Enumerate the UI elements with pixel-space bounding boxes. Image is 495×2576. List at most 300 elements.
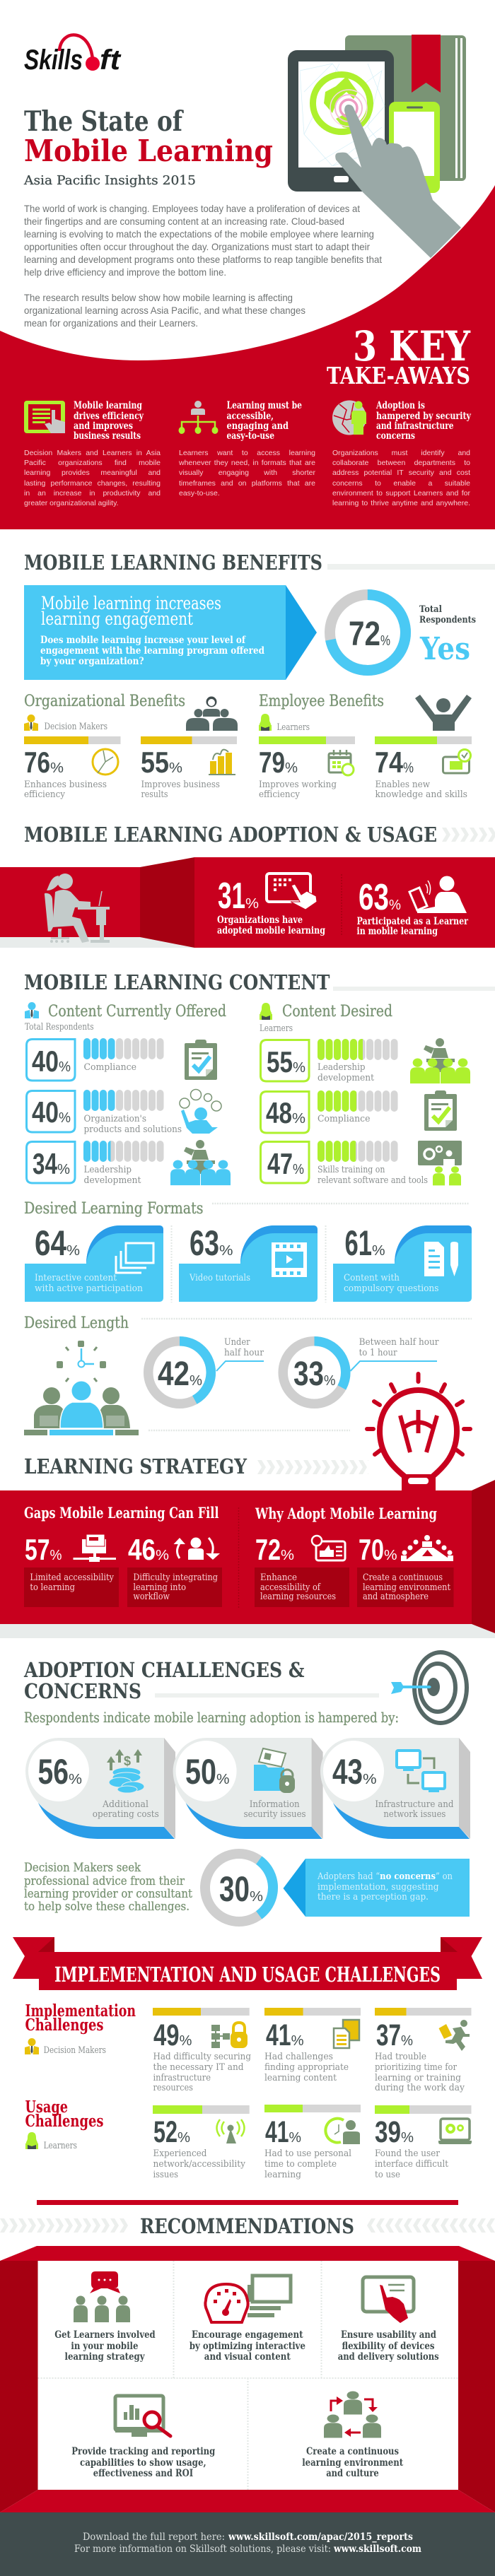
stat: 55 percent: 55	[141, 746, 169, 779]
heading: mobile learning content: MOBILE LEARNING CONTENT	[24, 970, 330, 994]
icon: clock and team at table	[24, 1341, 139, 1435]
recommendation: optimize interactive content: Encourage engagement	[192, 2329, 303, 2341]
stat: 49 percent infrastructure: the necessary IT and	[153, 2062, 243, 2073]
stat: compliance 40 percent: 40	[32, 1045, 59, 1078]
stat: 63 percent learners: 63	[359, 877, 389, 918]
panel: infrastructure card: 43	[332, 1752, 363, 1792]
footer	[0, 2512, 495, 2576]
text: takeaway one body: greater organizational agility.	[24, 499, 118, 507]
stat: 70 percent continuous environment	[357, 1533, 454, 1607]
stat: 49 percent infrastructure: resources	[153, 2083, 193, 2093]
heading: implementation challenges: Challenges	[25, 2016, 103, 2035]
heading: 3 key take-aways	[327, 322, 470, 389]
stat: skills training 47 percent: 47	[267, 1147, 293, 1180]
recommendation: continuous learning environment: learning environment	[302, 2457, 404, 2469]
text: takeaway three heading: and infrastructure	[376, 420, 454, 432]
stat: 76 percent: efficiency	[24, 789, 66, 800]
callout: adopters no concerns: Adopters had “no concerns” on	[317, 1871, 453, 1882]
stat: 52 percent network issues: issues	[153, 2170, 178, 2180]
stat: 41 percent finding content: 41	[266, 2018, 291, 2052]
stat: 72 percent enhance accessibility: accessibility of	[260, 1582, 321, 1593]
chart: donut 33 percent half to one hour	[283, 1337, 439, 1404]
text: takeaway three body: learning to thrive anytime and anywhere.	[332, 499, 470, 507]
icon: woman at desk	[45, 874, 110, 943]
icon: decision maker	[24, 714, 38, 731]
text: takeaway two body: whenever they need, in formats that are	[179, 459, 315, 467]
stat: 76 percent	[24, 736, 120, 800]
footer: www.skillsoft.com/apac/2015_reports	[228, 2531, 413, 2543]
panel: format video tutorials: 63	[190, 1223, 219, 1263]
callout: engagement question	[24, 585, 317, 680]
label: decision makers: Decision Makers	[44, 2045, 106, 2056]
text: takeaway two body	[179, 448, 315, 512]
text: takeaway one body: Pacific organizations find mobile	[24, 459, 161, 467]
callout: engagement question: learning engagement	[41, 608, 193, 629]
text: decision makers seek advice: professional advice from their	[24, 1874, 185, 1888]
stat: 46 percent difficulty integrating: learning into	[133, 1582, 186, 1593]
label: decision makers: Decision Makers	[44, 722, 107, 732]
label: total respondents: Total Respondents	[25, 1022, 94, 1033]
panel: learning strategy	[0, 1480, 495, 1638]
icon: respondent	[25, 1002, 39, 1018]
recommendation: optimize interactive content: by optimizing interactive	[190, 2341, 305, 2352]
panel: format video tutorials	[179, 1223, 318, 1302]
stat: 39 percent user interface: to use	[375, 2170, 400, 2180]
recommendation: tracking and reporting	[71, 2396, 216, 2479]
recommendation: usability and flexibility: and delivery solutions	[338, 2351, 439, 2363]
text: takeaway one body: in an increase in productivity and	[24, 489, 161, 498]
title: Asia Pacific Insights 2015	[23, 173, 196, 188]
stat: 57 percent limited accessibility: to learning	[30, 1582, 75, 1593]
icon: coins and arrows: $	[124, 1754, 131, 1768]
stat: 39 percent user interface: interface difficult	[375, 2159, 449, 2170]
panel: format interactive content: with active participation	[35, 1283, 144, 1294]
text: takeaway three body: concerns to enable a suitable	[332, 479, 470, 488]
stat: 70 percent continuous environment: 70	[359, 1533, 384, 1566]
chart: donut 33 percent half to one hour: to 1 hour	[359, 1348, 397, 1358]
stat: 41 percent finding content: Had challenges	[264, 2052, 333, 2062]
stat: products 40 percent: %	[59, 1110, 71, 1126]
heading: learning strategy: LEARNING STRATEGY	[24, 1454, 247, 1478]
heading: employee benefits: Employee Benefits	[259, 693, 384, 710]
icon: tablet with hand	[24, 401, 65, 433]
chart: donut 42 percent under half hour: 42	[158, 1355, 190, 1393]
heading: gaps mobile learning can fill: Gaps Mobile Learning Can Fill	[24, 1504, 219, 1522]
panel: content currently offered	[25, 1002, 231, 1186]
recommendation: continuous learning environment: Create a continuous	[306, 2446, 399, 2457]
stat: 41 percent personal time: Had to use personal	[264, 2148, 351, 2159]
callout: engagement question: engagement with the learning program offered	[40, 645, 264, 657]
stat: compliance 48 percent	[260, 1090, 457, 1133]
stat: leadership 34 percent: development	[83, 1175, 141, 1186]
stat: 74 percent: knowledge and skills	[375, 789, 467, 800]
text: decision makers seek advice: Decision Makers seek	[24, 1861, 141, 1875]
stat: 52 percent network issues: Experienced	[153, 2148, 206, 2159]
stat: products 40 percent: products and solutions	[83, 1124, 182, 1135]
stat: 57 percent limited accessibility	[24, 1533, 119, 1607]
stat: 70 percent continuous environment: learning environment	[363, 1582, 451, 1593]
heading: adoption challenges and concerns	[23, 1658, 304, 1703]
panel: format compulsory questions	[333, 1223, 472, 1302]
stat: leadership 34 percent: %	[57, 1162, 70, 1177]
stat: 41 percent finding content: learning content	[264, 2073, 337, 2083]
stat: 79 percent: Improves working	[259, 780, 337, 790]
stat: 79 percent: efficiency	[259, 789, 301, 800]
icon: globe and person	[332, 400, 366, 435]
stat: 39 percent user interface: %	[401, 2130, 414, 2146]
panel: employee benefits	[259, 693, 472, 800]
chart: donut 72 percent	[330, 595, 406, 670]
text: decision makers seek advice	[24, 1861, 192, 1914]
panel: adoption and usage band	[0, 857, 495, 948]
heading: 3 key take-aways: 3 KEY	[353, 322, 470, 370]
stat: 31 percent organizations: 31	[218, 876, 245, 917]
stat: 63 percent learners	[356, 876, 468, 937]
text: takeaway one body: learning provides meaningful and	[24, 469, 161, 477]
title: Mobile Learning	[24, 134, 273, 168]
recommendation: continuous learning environment	[302, 2391, 404, 2479]
stat: 55 percent: %	[169, 760, 182, 776]
icon: learner	[260, 1003, 272, 1020]
icon: person arms raised	[415, 695, 472, 731]
text block: introduction: help drive efficiency and improve the bottom line.	[24, 266, 226, 278]
icon: learner	[259, 714, 272, 731]
text: takeaway three heading	[375, 400, 472, 442]
stat: leadership 55 percent: Leadership	[318, 1062, 365, 1073]
stat: 74 percent	[375, 736, 472, 800]
icon: coins and arrows	[107, 1749, 144, 1793]
recommendation: involve learners: learning strategy	[65, 2351, 146, 2363]
panel: usage challenges	[25, 2098, 472, 2180]
stat: skills training 47 percent: relevant software and tools	[318, 1175, 428, 1186]
recommendation: involve learners	[54, 2271, 156, 2363]
stat: 79 percent: %	[285, 760, 298, 776]
text: takeaway one heading	[74, 400, 144, 442]
panel: format interactive content: %	[66, 1243, 80, 1259]
stat: 76 percent: 76	[24, 746, 50, 779]
label: learners: Learners	[44, 2141, 77, 2151]
panel: information security card: 50	[185, 1752, 216, 1792]
text block: introduction: learning and development programs onto these platforms to reap tangible benefits that	[24, 254, 382, 265]
text: takeaway one heading: drives efficiency	[74, 411, 144, 422]
stat: 70 percent continuous environment: %	[384, 1548, 397, 1563]
text: takeaway one body: Decision Makers and Learners in Asia	[24, 449, 161, 457]
stat: 31 percent organizations: Organizations have	[217, 914, 303, 926]
stat: 46 percent difficulty integrating: workflow	[133, 1592, 170, 1602]
stat: 76 percent: %	[50, 760, 64, 776]
chart: donut 42 percent under half hour: Under	[224, 1337, 250, 1348]
icon: film strip	[272, 1242, 307, 1277]
stat: skills training 47 percent: %	[293, 1162, 304, 1177]
heading: content desired: Content Desired	[282, 1003, 392, 1021]
heading: organizational benefits: Organizational Benefits	[24, 693, 185, 710]
panel: recommendations	[0, 2246, 495, 2512]
panel: format interactive content: Interactive content	[35, 1273, 117, 1283]
panel: operating costs card: 56	[38, 1752, 69, 1792]
heading: implementation challenges: Implementation	[25, 2001, 136, 2021]
callout: engagement question: by your organization?	[40, 656, 144, 667]
stat: 52 percent network issues: %	[177, 2130, 190, 2146]
stat: leadership 34 percent: Leadership	[83, 1165, 132, 1175]
heading: usage challenges: Challenges	[25, 2112, 103, 2131]
text block: introduction: their fingertips and are consuming content at an increasing rate. Cloud-based	[24, 216, 344, 227]
text: takeaway one heading: business results	[74, 430, 141, 442]
text: takeaway two heading: Learning must be	[226, 400, 302, 411]
panel: operating costs card: Additional	[102, 1799, 148, 1810]
logo: Skillsoft: Skills	[24, 45, 83, 76]
recommendation: usability and flexibility	[338, 2277, 439, 2363]
text block: introduction: The research results below show how mobile learning is affecting	[24, 292, 293, 303]
stat: products 40 percent: Organization's	[83, 1114, 146, 1124]
text: total respondents yes	[419, 604, 476, 667]
text: takeaway two heading: accessible,	[226, 411, 274, 422]
chart: donut 33 percent half to one hour: 33	[293, 1355, 324, 1393]
text: takeaway three heading: concerns	[376, 430, 415, 442]
stat: 72 percent enhance accessibility	[255, 1533, 349, 1607]
recommendation: optimize interactive content	[190, 2276, 305, 2363]
chart: donut 33 percent half to one hour: %	[324, 1373, 336, 1389]
stat: 41 percent personal time: time to complete	[264, 2159, 337, 2170]
heading: why adopt mobile learning: Why Adopt Mobile Learning	[255, 1505, 437, 1522]
stat: 74 percent: %	[403, 760, 414, 776]
recommendation: usability and flexibility: Ensure usability and	[341, 2329, 436, 2341]
stat: 55 percent: Improves business	[141, 780, 220, 790]
stat: 63 percent learners: Participated as a Learner	[356, 916, 468, 927]
callout: engagement question: Mobile learning increases	[41, 593, 221, 613]
label: learners: Learners	[260, 1023, 293, 1034]
text block: introduction	[24, 203, 382, 329]
text: takeaway one body	[24, 448, 161, 512]
heading: adoption challenges and concerns: ADOPTION CHALLENGES &	[23, 1658, 304, 1682]
text: total respondents yes: Yes	[419, 631, 470, 667]
stat: 72 percent enhance accessibility: learning resources	[260, 1592, 336, 1602]
panel: infrastructure card: network issues	[383, 1809, 446, 1820]
panel: 3 key take-aways	[0, 185, 495, 529]
panel: operating costs card: %	[69, 1772, 82, 1787]
panel: format compulsory questions: compulsory questions	[344, 1283, 438, 1294]
panel: content desired	[260, 1003, 470, 1186]
stat: 76 percent: Enhances business	[24, 780, 107, 790]
stat: 41 percent finding content: %	[291, 2033, 304, 2049]
title: The State of	[24, 105, 184, 138]
stat: compliance 40 percent	[27, 1038, 217, 1081]
stat: 46 percent difficulty integrating: %	[156, 1548, 169, 1563]
stat: 39 percent user interface: Found the user	[375, 2148, 441, 2159]
icon: light bulb	[367, 1374, 470, 1491]
text: takeaway two heading: easy-to-use	[226, 430, 274, 442]
stat: 72 percent enhance accessibility: %	[281, 1548, 294, 1563]
stat: 37 percent prioritizing time: learning or training	[375, 2073, 461, 2083]
panel: format compulsory questions: Content with	[344, 1273, 400, 1283]
text: decision makers seek advice: learning provider or consultant	[24, 1887, 192, 1901]
panel: information security card: security issues	[244, 1809, 306, 1820]
panel: infrastructure card	[320, 1738, 470, 1839]
recommendation: optimize interactive content: and visual content	[204, 2351, 291, 2363]
recommendation: tracking and reporting: Provide tracking and reporting	[71, 2446, 216, 2457]
icon: learner	[25, 2132, 38, 2149]
text block: introduction: organizational learning across Asia Pacific, and what these changes	[24, 305, 305, 316]
stat: 49 percent infrastructure: infrastructure	[153, 2073, 211, 2083]
stat: leadership 55 percent	[260, 1038, 470, 1083]
stat: leadership 55 percent: %	[293, 1060, 305, 1076]
panel: information security card: Information	[250, 1799, 300, 1810]
panel: operating costs card	[25, 1738, 175, 1839]
stat: 41 percent personal time: %	[289, 2130, 301, 2146]
stat: 37 percent prioritizing time	[375, 2008, 471, 2093]
illustration: devices and hand	[288, 35, 466, 258]
text block: introduction: learning is evolving to match the expectations of the mobile employee where learning	[24, 228, 374, 240]
heading: mobile learning benefits: MOBILE LEARNING BENEFITS	[24, 551, 322, 575]
panel: infrastructure card: %	[363, 1772, 377, 1787]
recommendation: involve learners: Get Learners involved	[54, 2329, 156, 2341]
icon: target and arrow	[391, 1652, 467, 1723]
chart: donut 42 percent under half hour	[148, 1337, 264, 1404]
stat: 63 percent learners: in mobile learning	[356, 926, 438, 937]
panel: format video tutorials: Video tutorials	[189, 1273, 250, 1283]
footer: For more information on Skillsoft solutions, please visit:	[74, 2543, 331, 2555]
recommendation: tracking and reporting: capabilities to show usage,	[80, 2457, 206, 2469]
stat: 52 percent network issues: network/accessibility	[153, 2159, 246, 2170]
chart: donut 42 percent under half hour: half hour	[224, 1348, 264, 1358]
stat: 55 percent: results	[141, 789, 168, 800]
stat: leadership 34 percent: 34	[33, 1147, 57, 1180]
stat: 55 percent	[141, 736, 237, 800]
heading: implementation challenges	[25, 2001, 136, 2035]
callout: adopters no concerns: implementation, suggesting	[318, 1882, 438, 1893]
icon: decision maker	[25, 2038, 39, 2054]
heading: adoption challenges and concerns: CONCERNS	[24, 1679, 141, 1703]
logo: Skillsoft	[24, 35, 122, 76]
recommendation: involve learners: in your mobile	[71, 2341, 138, 2352]
heading: usage challenges: Usage	[25, 2098, 68, 2117]
stat: 57 percent limited accessibility: %	[50, 1548, 62, 1563]
text: total respondents yes: Total	[419, 604, 442, 615]
stat: products 40 percent: 40	[32, 1095, 59, 1129]
text: takeaway three heading: Adoption is	[375, 400, 425, 411]
stat: 41 percent personal time: 41	[265, 2115, 289, 2149]
text: respondents indicate: Respondents indicate mobile learning adoption is hampered by:	[24, 1709, 399, 1726]
stat: 41 percent finding content	[264, 2008, 361, 2083]
title	[23, 105, 273, 188]
heading: mobile learning adoption and usage: MOBILE LEARNING ADOPTION & USAGE	[24, 823, 437, 847]
text: takeaway three body	[332, 448, 470, 512]
text: takeaway three heading: hampered by security	[376, 411, 472, 422]
stat: skills training 47 percent	[260, 1141, 462, 1186]
stat: 79 percent: 79	[259, 746, 285, 779]
icon: folder and padlock	[254, 1748, 295, 1793]
text: total respondents yes: Respondents	[419, 615, 476, 625]
panel: format interactive content: 64	[35, 1223, 66, 1263]
heading: desired learning formats: Desired Learning Formats	[24, 1200, 204, 1218]
stat: 70 percent continuous environment: and atmosphere	[363, 1592, 429, 1602]
stat: 57 percent limited accessibility: Limited accessibility	[30, 1572, 115, 1583]
stat: 49 percent infrastructure	[153, 2008, 251, 2093]
stat: 70 percent continuous environment: Create a continuous	[363, 1572, 443, 1583]
stat: 46 percent difficulty integrating: 46	[128, 1533, 156, 1566]
text: takeaway one heading: and improves	[74, 420, 133, 432]
text: takeaway three body: Organizations must identify and	[332, 449, 470, 457]
icon: org chart	[178, 401, 218, 434]
text: takeaway three body: collaborate between departments to	[332, 459, 470, 467]
stat: 49 percent infrastructure: Had difficulty securing	[153, 2052, 251, 2062]
chart: donut 30 percent: 30	[219, 1869, 250, 1909]
callout: adopters no concerns	[283, 1859, 470, 1917]
text: takeaway three body: environment to support Learners and for	[332, 489, 470, 498]
heading: desired length: Desired Length	[24, 1315, 129, 1332]
panel: implementation challenges	[25, 2001, 471, 2093]
label: learners: Learners	[277, 722, 310, 733]
stat: 74 percent: 74	[375, 746, 404, 779]
panel: operating costs card: operating costs	[93, 1809, 159, 1820]
chart: donut 42 percent under half hour: %	[190, 1373, 202, 1389]
banner: implementation and usage challenges	[13, 1937, 482, 1990]
panel: organizational benefits	[24, 693, 238, 800]
stat: 41 percent finding content: finding appropriate	[264, 2062, 349, 2073]
chart: donut 30 percent	[192, 1840, 286, 1935]
panel: format video tutorials: %	[219, 1243, 233, 1259]
stat: products 40 percent	[27, 1090, 221, 1135]
footer: www.skillsoft.com	[333, 2543, 421, 2555]
heading: recommendations: RECOMMENDATIONS	[140, 2214, 354, 2238]
panel: format compulsory questions: 61	[345, 1223, 372, 1263]
text: takeaway two body: Learners want to access learning	[179, 449, 315, 457]
chart: donut 30 percent: %	[250, 1889, 263, 1905]
callout: adopters no concerns: there is a perception gap.	[318, 1892, 429, 1902]
chart: donut 72 percent: %	[380, 633, 390, 649]
recommendation: tracking and reporting: effectiveness and ROI	[93, 2468, 193, 2479]
stat: 31 percent organizations: %	[245, 896, 259, 912]
text block: introduction: opportunities often occur throughout the day. Organizations must start to adapt their	[24, 241, 370, 252]
icon: networked monitors	[397, 1751, 445, 1792]
stat: compliance 48 percent: %	[292, 1111, 305, 1127]
stat: skills training 47 percent: Skills training on	[318, 1165, 385, 1175]
stat: 79 percent	[259, 736, 355, 800]
logo: Skillsoft: ft	[100, 45, 122, 76]
chart: donut 33 percent half to one hour: Between half hour	[359, 1337, 439, 1348]
stat: 52 percent network issues	[153, 2105, 250, 2180]
stat: 37 percent prioritizing time: 37	[376, 2018, 401, 2052]
text block: introduction: mean for organizations and their Learners.	[24, 317, 198, 329]
heading: usage challenges	[25, 2098, 103, 2131]
icon: stacked windows	[116, 1243, 153, 1273]
panel: infrastructure card: Infrastructure and	[375, 1799, 453, 1810]
stat: 41 percent personal time	[264, 2105, 361, 2180]
icon: woman and team	[186, 697, 238, 731]
panel: format compulsory questions: %	[372, 1243, 385, 1259]
heading: content currently offered: Content Currently Offered	[48, 1003, 226, 1021]
panel: format interactive content	[25, 1223, 163, 1302]
text: takeaway two body: visually engaging with shorter	[179, 469, 315, 477]
stat: leadership 34 percent	[27, 1140, 231, 1186]
recommendation: continuous learning environment: and culture	[326, 2468, 379, 2479]
stat: 72 percent enhance accessibility: Enhance	[260, 1572, 297, 1583]
text: takeaway two body: easy-to-use.	[179, 489, 220, 498]
text: takeaway one body: lasting performance changes, resulting	[24, 479, 161, 488]
footer: Download the full report here:	[83, 2531, 225, 2543]
stat: 72 percent enhance accessibility: 72	[255, 1533, 281, 1566]
stat: 46 percent difficulty integrating: Difficulty integrating	[133, 1572, 218, 1583]
stat: 39 percent user interface: 39	[375, 2115, 401, 2149]
recommendation: usability and flexibility: flexibility of devices	[342, 2341, 435, 2352]
stat: 41 percent personal time: learning	[264, 2170, 301, 2180]
stat: 46 percent difficulty integrating	[127, 1533, 222, 1607]
stat: 49 percent infrastructure: %	[180, 2033, 192, 2049]
stat: 37 percent prioritizing time: during the work day	[375, 2083, 465, 2093]
stat: leadership 55 percent: development	[318, 1073, 375, 1083]
stat: 31 percent organizations	[217, 874, 325, 936]
text block: introduction: The world of work is changing. Employees today have a proliferation of devices at	[24, 203, 360, 214]
callout: engagement question: Does mobile learning increase your level of	[40, 635, 246, 646]
